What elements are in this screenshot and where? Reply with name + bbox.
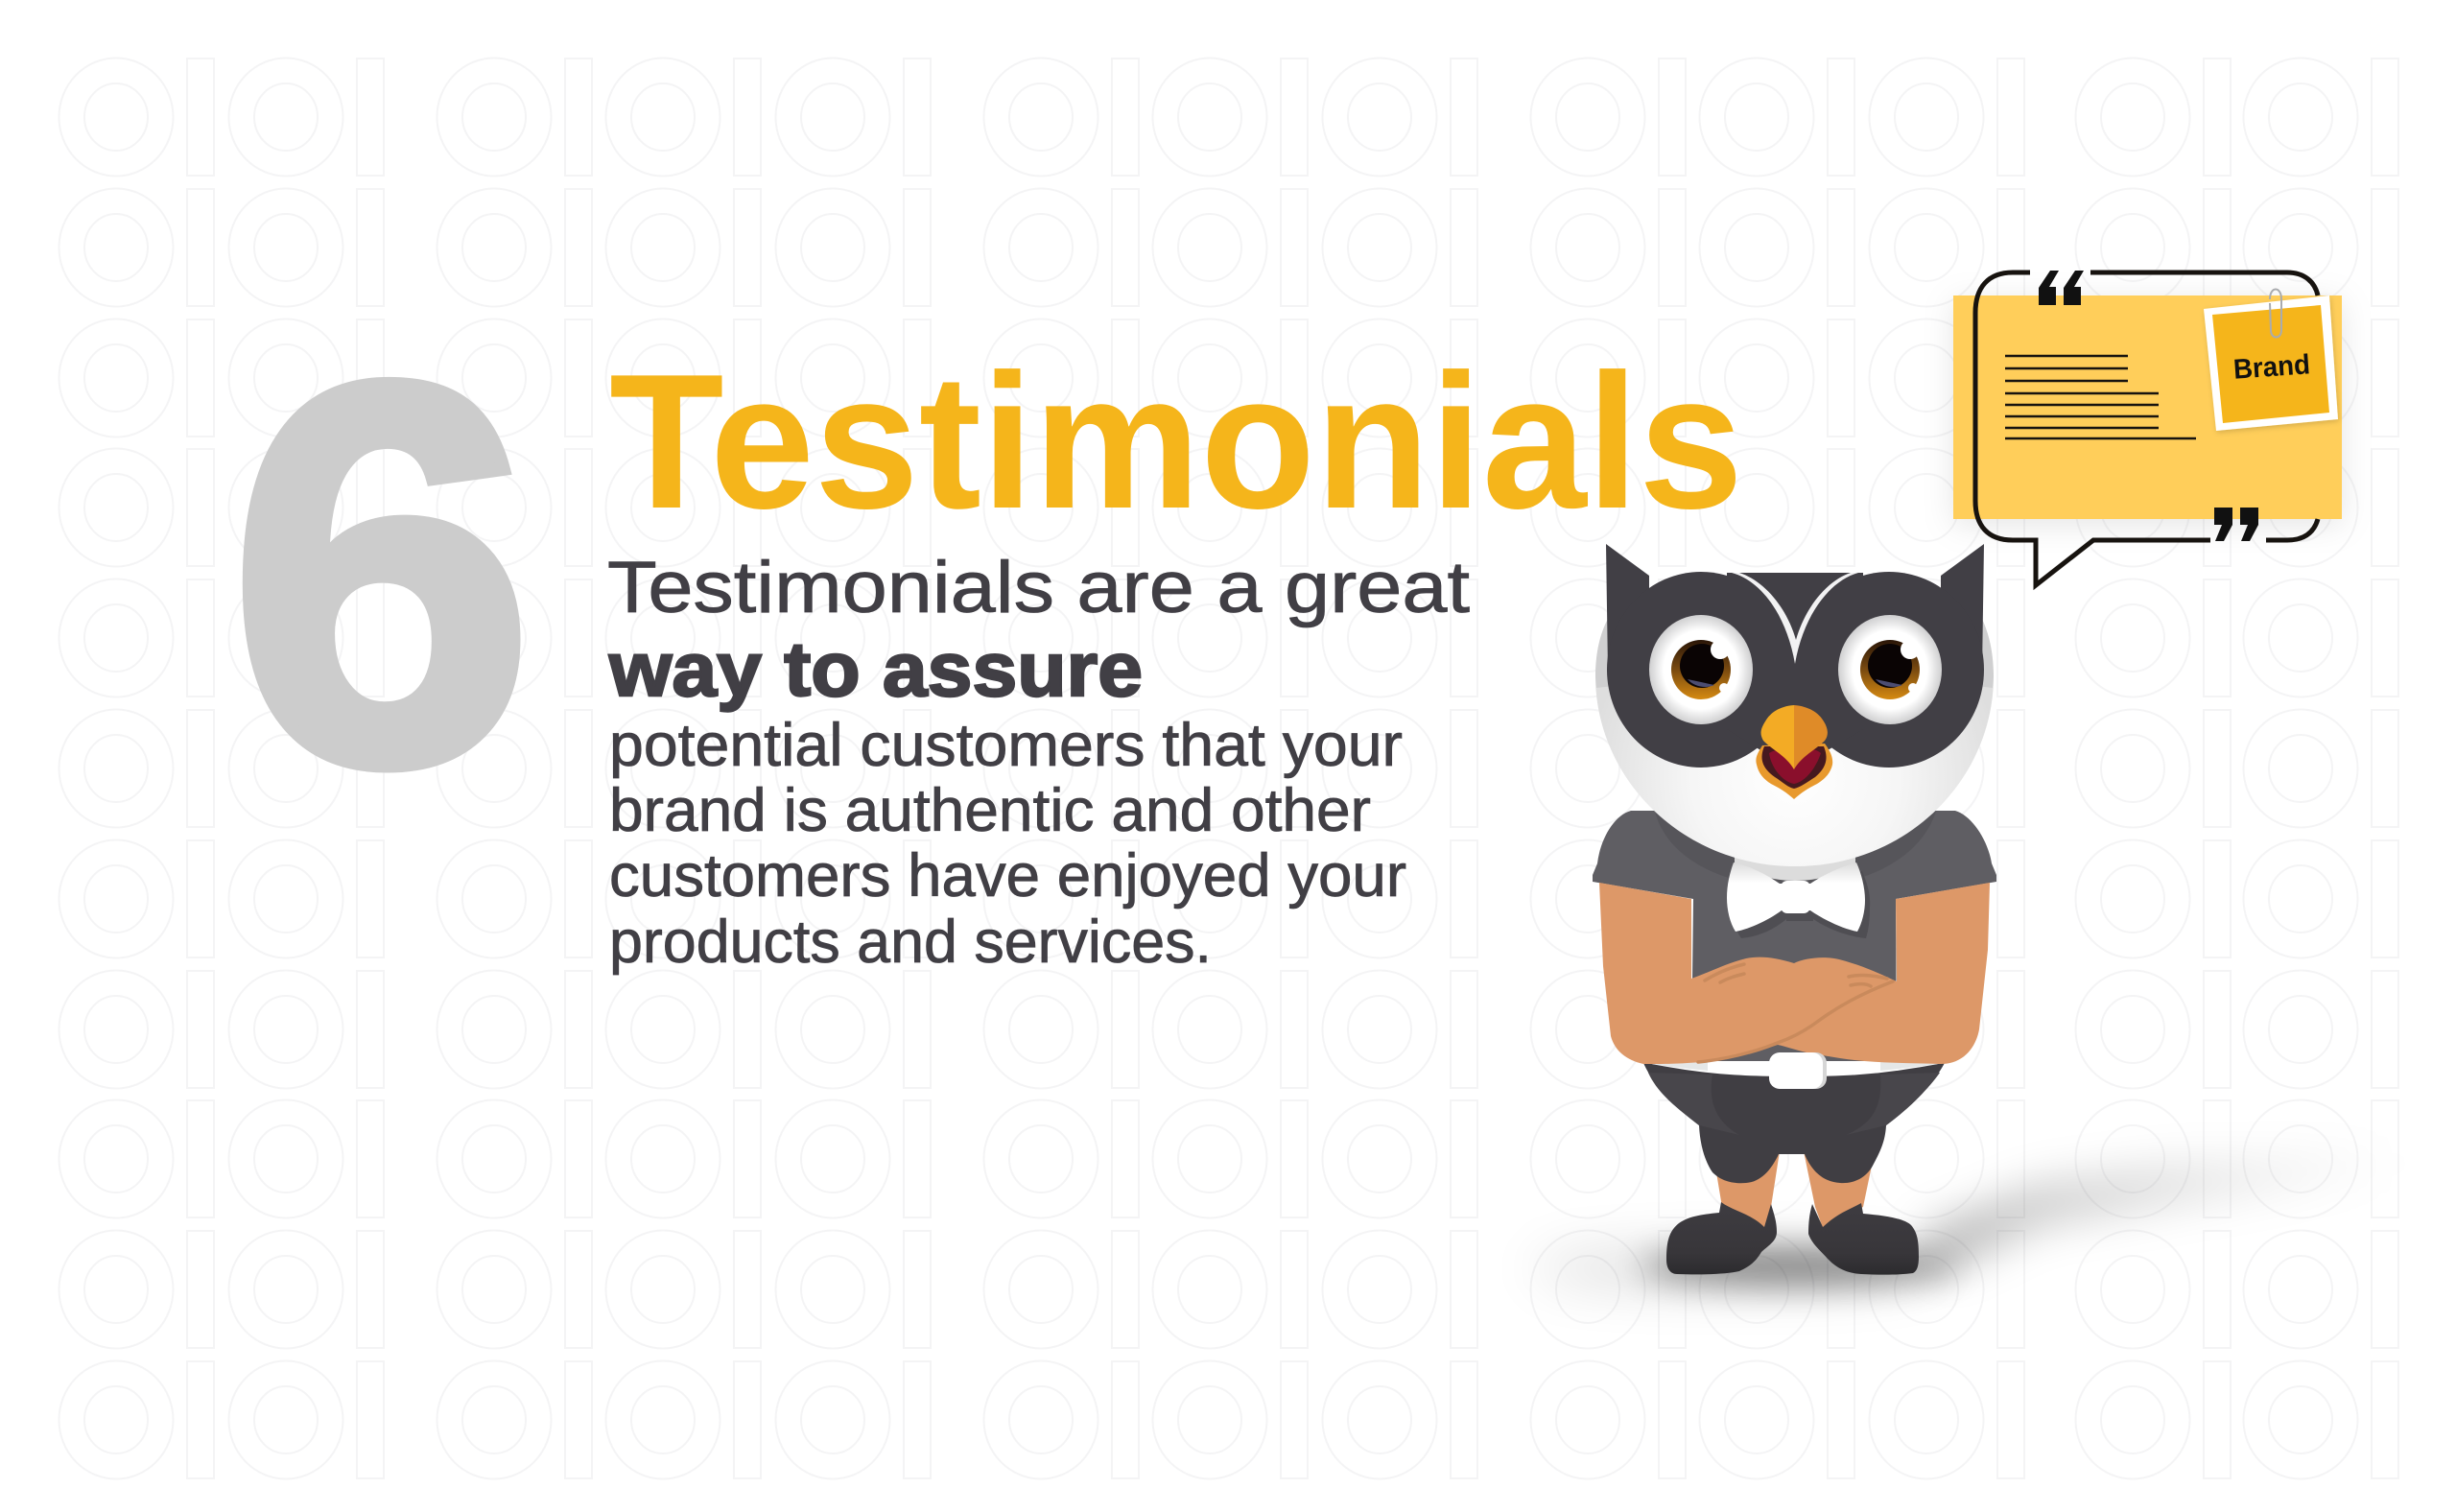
body text block — [607, 547, 1470, 976]
yellow card — [1953, 295, 2342, 519]
section number: 6 — [229, 272, 533, 876]
brand note — [2204, 290, 2338, 431]
belt side shade — [1646, 1059, 1944, 1071]
belt — [1646, 1055, 1944, 1076]
brow lines — [1732, 573, 1858, 664]
tongue — [1769, 749, 1821, 784]
neck shading — [1655, 811, 1936, 887]
emphasis line: way to assure — [608, 626, 1143, 712]
left eye — [1649, 615, 1753, 724]
bow tie wings — [1727, 862, 1865, 932]
body line 4: products and services. — [609, 909, 1212, 976]
owl mascot — [1530, 544, 2418, 1286]
intro line: Testimonials are a great — [607, 547, 1470, 628]
close foot shadow — [1641, 1247, 1957, 1286]
body line 2: brand is authentic and other — [609, 777, 1371, 844]
brand label: Brand — [2232, 349, 2311, 386]
upper beak left — [1761, 705, 1794, 769]
arm creases — [1698, 964, 1893, 1062]
note frame — [2204, 295, 2338, 431]
crossed arms — [1599, 883, 1990, 1064]
belt buckle — [1769, 1052, 1827, 1089]
speech bubble testimonial card — [1953, 271, 2342, 585]
shorts — [1643, 1063, 1945, 1183]
paperclip — [2270, 290, 2281, 338]
ground shadow — [1530, 1146, 2418, 1286]
wide foot shadow — [1530, 1251, 1943, 1286]
right shoe — [1808, 1203, 1919, 1275]
body line 3: customers have enjoyed your — [609, 842, 1406, 910]
right eye — [1838, 615, 1942, 724]
left shoe — [1666, 1202, 1777, 1274]
body line 1: potential customers that your — [609, 712, 1403, 779]
bow tie shadow — [1732, 871, 1870, 938]
cast shadow — [1919, 1146, 2418, 1271]
collar — [1735, 849, 1855, 881]
bow tie — [1727, 862, 1870, 938]
closing quotation mark — [2214, 508, 2258, 541]
head side shade — [1595, 619, 1994, 688]
legs — [1714, 1151, 1873, 1228]
note face — [2212, 305, 2329, 423]
head — [1595, 576, 1994, 866]
bubble outline with tail — [1975, 272, 2318, 585]
title: Testimonials — [609, 335, 1743, 549]
beak and mouth — [1756, 705, 1832, 799]
eye mask and ears — [1606, 544, 1984, 768]
shirt — [1593, 811, 1996, 1061]
shorts side highlight — [1648, 1073, 1940, 1135]
mouth interior — [1762, 746, 1827, 789]
text lines — [2005, 356, 2196, 438]
opening quotation mark — [2039, 271, 2084, 305]
upper beak right — [1794, 705, 1828, 769]
mouth outer — [1756, 744, 1832, 799]
bow tie knot — [1781, 881, 1810, 913]
